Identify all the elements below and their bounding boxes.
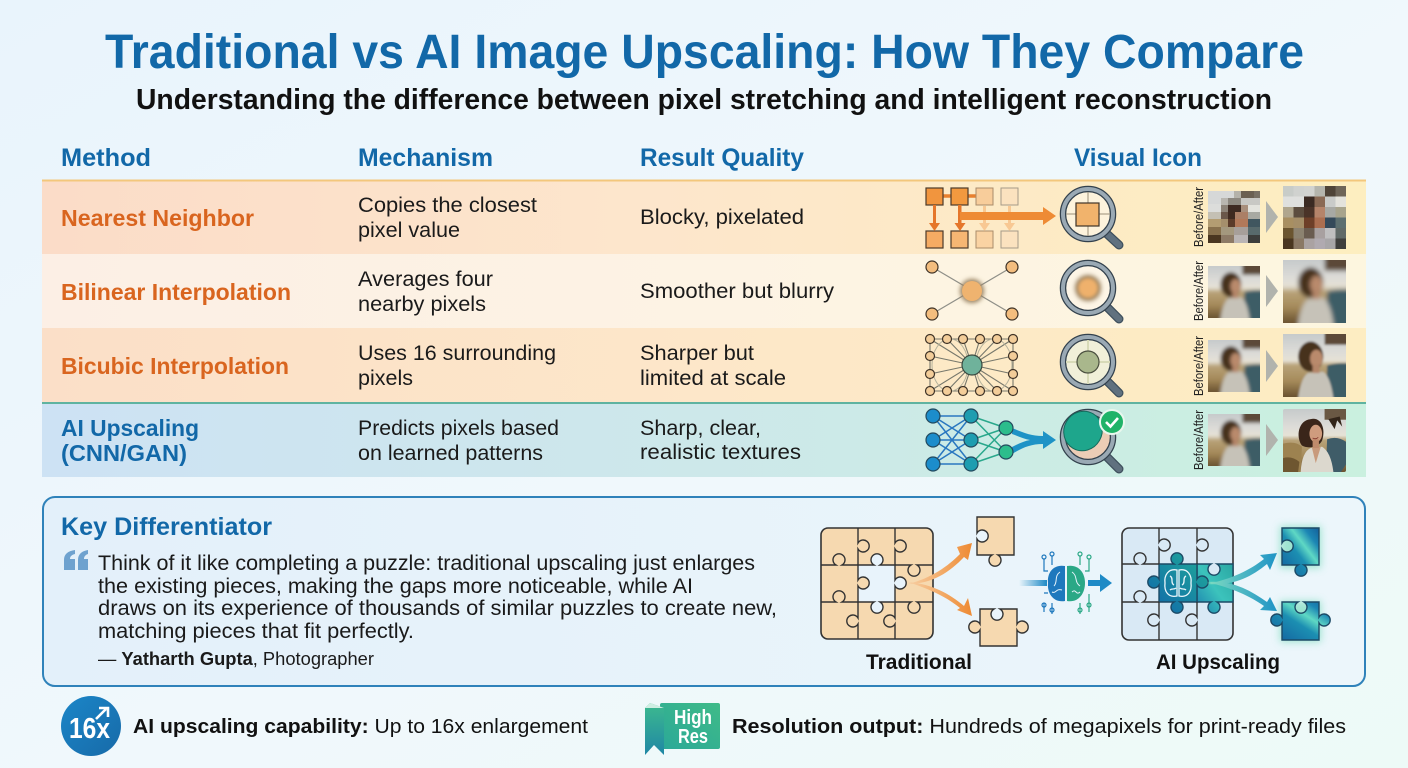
puzzle piece: AI top [1280, 526, 1321, 576]
puzzle piece: traditional bottom [969, 609, 1028, 646]
icon: 16x badge [61, 696, 121, 756]
row: AI upscaling: Predicts pixels based [358, 417, 559, 440]
row: nearest neighbor: Blocky, pixelated [640, 206, 804, 229]
icon: brain processor [1019, 552, 1112, 614]
after photo: mildly sharp [1283, 334, 1346, 397]
puzzle piece: AI bottom [1271, 601, 1330, 642]
row: bicubic interpolation: pixels [358, 367, 413, 390]
panel: key differentiator [43, 497, 1365, 686]
photo label: Before/After [1191, 260, 1206, 321]
row: AI upscaling: realistic textures [640, 441, 801, 464]
caption: traditional: Traditional [866, 651, 972, 674]
row: bicubic interpolation: Bicubic Interpolation [61, 353, 289, 379]
diagram: AI puzzle [1122, 528, 1233, 640]
row: bicubic interpolation: Sharper but [640, 342, 754, 365]
caption: AI upscaling: AI Upscaling [1156, 651, 1280, 674]
icon: magnifier with blur [1063, 263, 1119, 319]
quote text [98, 552, 777, 643]
photo label: Before/After [1191, 335, 1206, 396]
title: Traditional vs AI Image Upscaling: How They Compare [105, 26, 1304, 79]
subtitle: Understanding the difference between pixel stretching and intelligent reconstruction [136, 84, 1272, 116]
icon: 16x badge: 16x [69, 713, 110, 745]
photo label: Before/After [1191, 409, 1206, 470]
row: bilinear interpolation: Bilinear Interpolation [61, 279, 291, 305]
before photo: blurred [1208, 414, 1260, 466]
icon: pixel copy grid [926, 188, 1056, 248]
stat: resolution output: Resolution output: Hundreds of megapixels for print-ready files [732, 716, 1346, 738]
after photo: blurred [1283, 260, 1346, 323]
row: bilinear interpolation: nearby pixels [358, 293, 486, 316]
row: bilinear interpolation: Smoother but blurry [640, 280, 835, 303]
missing piece [858, 554, 906, 613]
table header [61, 144, 1202, 172]
icon: neural network [926, 409, 1056, 471]
table header: Visual Icon [1074, 144, 1202, 172]
row: AI upscaling: (CNN/GAN) [61, 440, 187, 466]
row: nearest neighbor: Nearest Neighbor [61, 205, 254, 231]
arrow: before to after [1266, 275, 1278, 307]
right filled piece [1197, 564, 1233, 613]
arrow: before to after [1266, 201, 1278, 233]
arrow: before to after [1266, 424, 1278, 456]
row: bicubic interpolation: Uses 16 surrounding [358, 342, 556, 365]
row: nearest neighbor [42, 180, 1366, 254]
table header: Result Quality [640, 144, 804, 172]
icon: magnifier with pixel [1063, 189, 1119, 245]
icon: high res ribbon: Res [678, 726, 708, 748]
icon: four-point blend [926, 261, 1018, 320]
panel heading: Key Differentiator [61, 513, 272, 541]
quote text: matching pieces that fit perfectly. [98, 620, 414, 643]
row: bilinear interpolation: Averages four [358, 268, 493, 291]
after photo: sharp portrait [1283, 409, 1346, 472]
icon: high res ribbon [645, 703, 720, 755]
row: bicubic interpolation [42, 321, 1366, 410]
arrows: traditional pieces [908, 543, 972, 616]
photo label: Before/After [1191, 186, 1206, 247]
arrow: before to after [1266, 350, 1278, 382]
before photo: blurred [1208, 266, 1260, 318]
before photo: blurred [1208, 340, 1260, 392]
quote text: draws on its experience of thousands of similar puzzles to create new, [98, 597, 777, 620]
row: AI upscaling [42, 402, 1366, 477]
table header: Method [61, 144, 151, 172]
before photo: pixelated [1208, 191, 1260, 243]
arrows: AI pieces [1207, 553, 1277, 611]
center filled piece [1148, 553, 1208, 613]
attribution: — Yatharth Gupta, Photographer [98, 649, 374, 669]
table header: Mechanism [358, 144, 493, 172]
row: nearest neighbor: pixel value [358, 219, 460, 242]
row: bilinear interpolation [42, 247, 1366, 336]
icon: quote mark [64, 550, 88, 570]
row: AI upscaling: AI Upscaling [61, 415, 199, 441]
stat: AI upscaling capability: AI upscaling capability: Up to 16x enlargement [133, 716, 588, 738]
icon: magnifier with check badge [1057, 404, 1124, 469]
diagram: traditional puzzle [821, 528, 933, 639]
icon: white brain [1165, 570, 1191, 596]
row: AI upscaling: on learned patterns [358, 442, 543, 465]
row: nearest neighbor: Copies the closest [358, 194, 537, 217]
row: AI upscaling: Sharp, clear, [640, 417, 761, 440]
icon: magnifier with sharper dot [1063, 337, 1119, 393]
puzzle piece: traditional top [977, 517, 1014, 566]
after photo: blocky [1283, 186, 1346, 249]
icon: high res ribbon: High [674, 707, 712, 729]
icon: sixteen-point network [926, 334, 1018, 396]
row: bicubic interpolation: limited at scale [640, 367, 786, 390]
quote text: Think of it like completing a puzzle: traditional upscaling just enlarges [98, 552, 755, 575]
quote text: the existing pieces, making the gaps more noticeable, while AI [98, 575, 693, 598]
